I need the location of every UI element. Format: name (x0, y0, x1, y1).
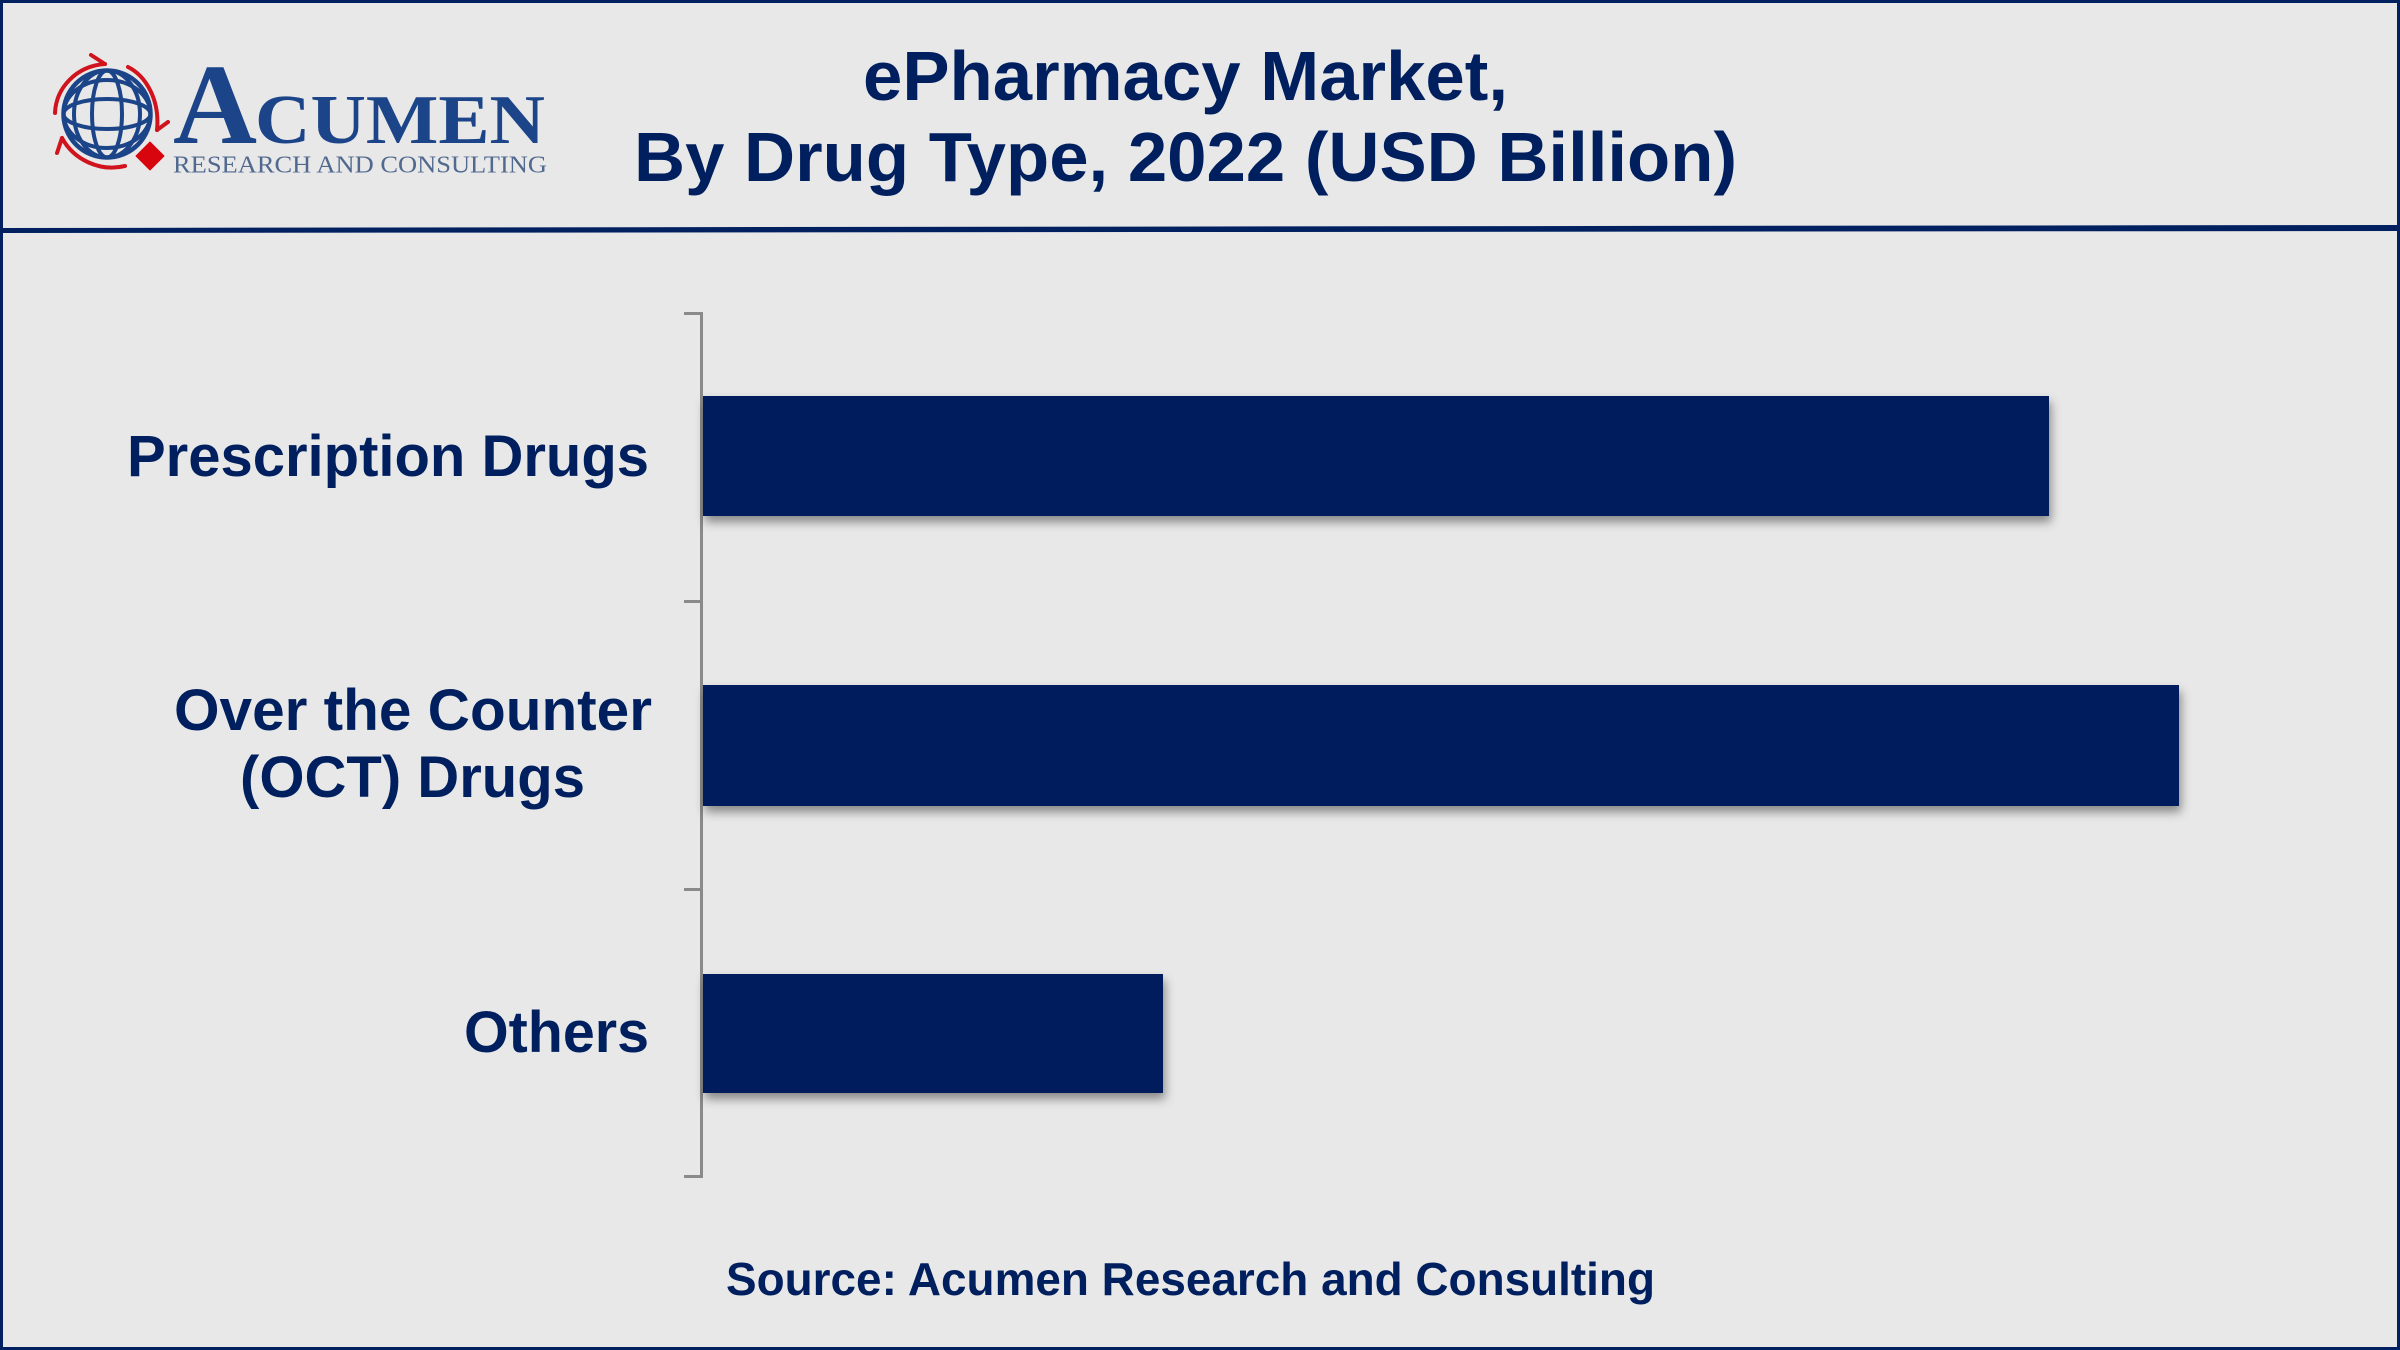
bar: Over the Counter (OCT) Drugs (703, 685, 2179, 806)
logo: Acumen Research and Consulting (55, 41, 547, 178)
label: Prescription Drugs: Prescription Drugs (127, 424, 649, 489)
logo wordmark: A (173, 41, 257, 168)
icon: globe (64, 70, 150, 158)
bar: Others (703, 974, 1163, 1093)
chart: horizontal bar chart (127, 314, 2179, 1176)
title: ePharmacy Market, (863, 37, 1508, 115)
logo: Acumen Research and Consulting: CUMEN (255, 82, 545, 159)
label: Others: Others (464, 1000, 649, 1065)
label: Over the Counter (OCT) Drugs: (OCT) Drugs (240, 745, 585, 810)
bar: Prescription Drugs (703, 396, 2049, 516)
icon: red arrows and diamond (55, 55, 168, 170)
label: Over the Counter (OCT) Drugs: Over the Counter (174, 678, 652, 743)
source note: Source: Acumen Research and Consulting (726, 1253, 1655, 1305)
title: By Drug Type, 2022 (USD Billion) (634, 118, 1737, 196)
category axis (684, 314, 702, 1176)
title (634, 37, 1737, 196)
label: Over the Counter (OCT) Drugs (174, 678, 652, 810)
logo tagline: RESEARCH AND CONSULTING (173, 152, 547, 178)
